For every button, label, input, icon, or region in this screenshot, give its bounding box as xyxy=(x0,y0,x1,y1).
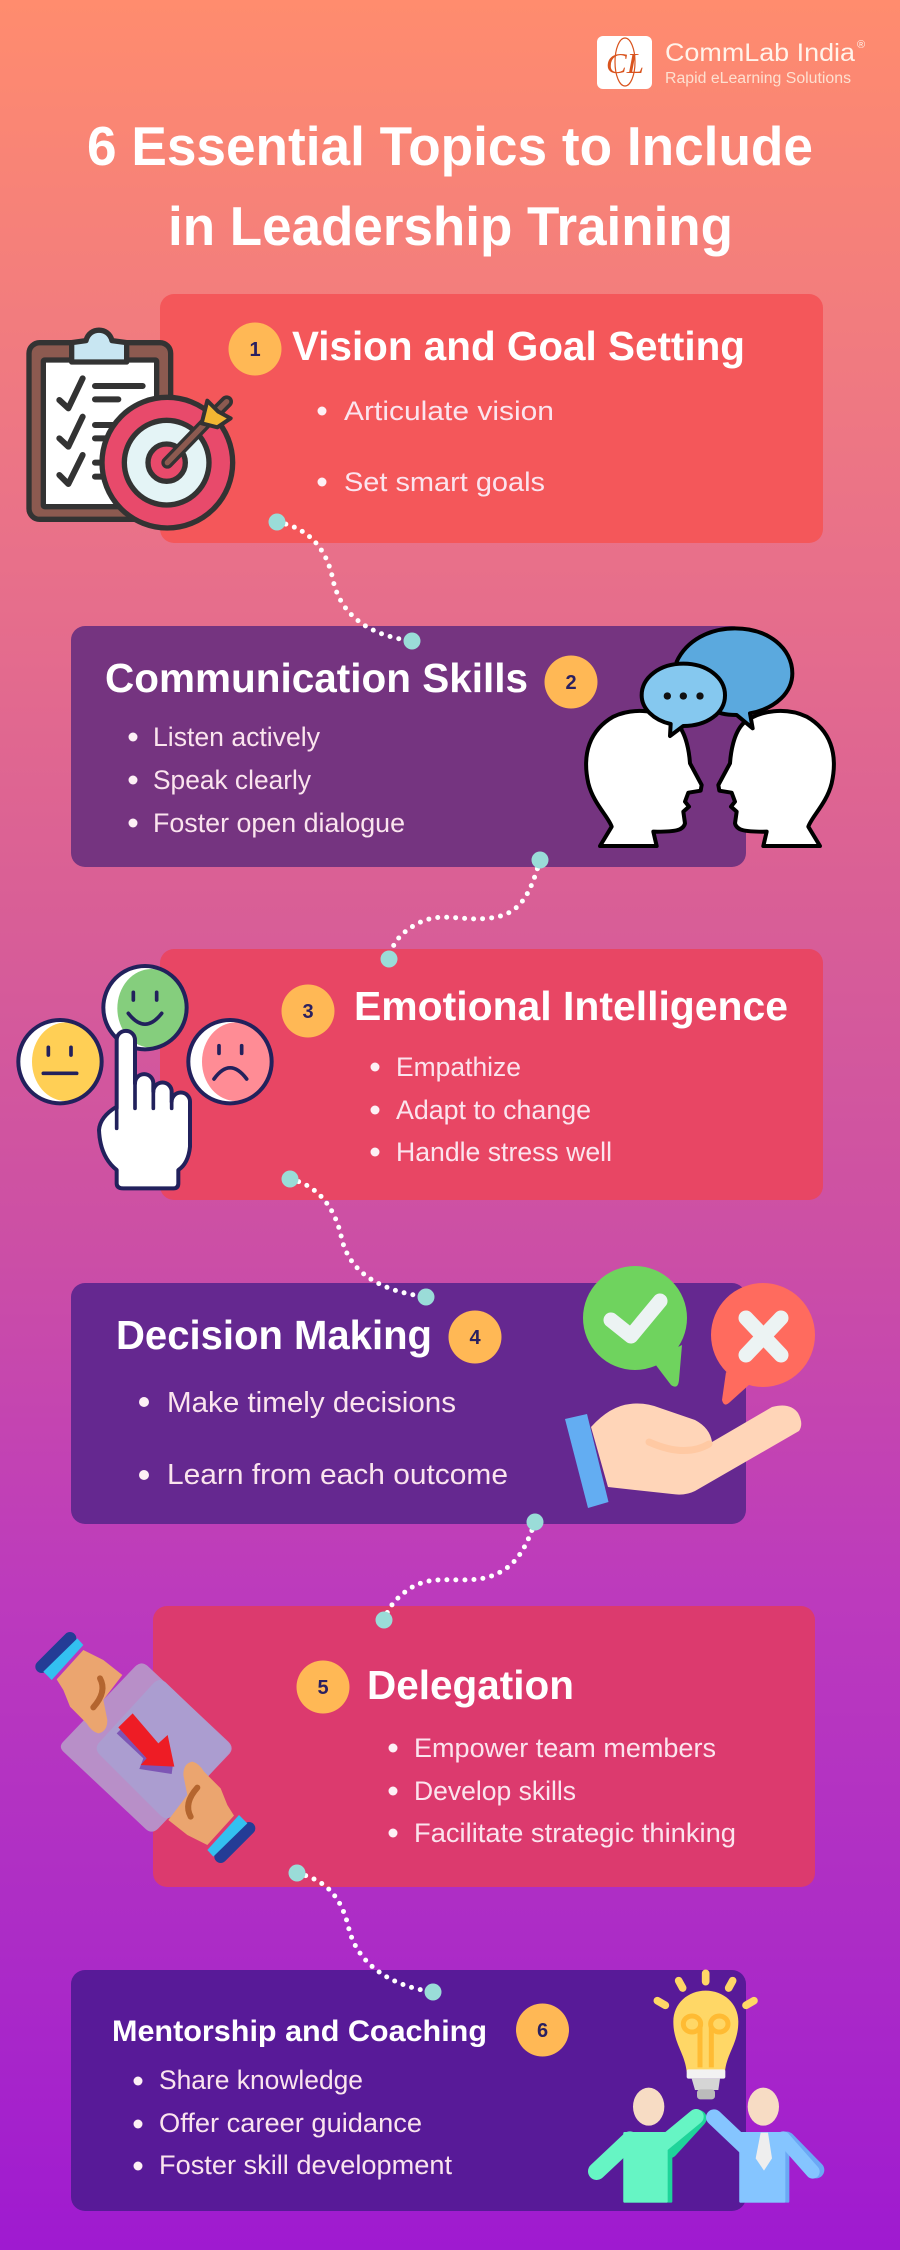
heading 1: Vision and Goal Setting xyxy=(292,323,745,369)
panel 4: Decision Making xyxy=(71,1266,815,1524)
bullets 1: Articulate vision xyxy=(344,396,554,426)
number badge 2: 2 xyxy=(565,672,577,694)
bullets 3: Handle stress well xyxy=(396,1137,612,1167)
connector: step 4 to 5 xyxy=(376,1514,544,1628)
number badge 2 xyxy=(544,656,598,708)
bullets 5: Facilitate strategic thinking xyxy=(414,1818,736,1848)
bullets 2: Listen actively xyxy=(153,722,320,752)
connector: step 2 to 3 xyxy=(380,852,548,968)
bullets 3: Adapt to change xyxy=(396,1095,591,1125)
bullets 1 xyxy=(318,396,554,497)
heading 3: Emotional Intelligence xyxy=(354,983,788,1029)
logo: CommLab India: ® xyxy=(857,39,865,51)
logo: CommLab India: Rapid eLearning Solutions xyxy=(665,70,851,87)
logo: CommLab India: CL xyxy=(606,48,644,80)
number badge 3 xyxy=(282,984,334,1038)
bullets 2: Speak clearly xyxy=(153,765,311,795)
connector: step 1 to 2 xyxy=(268,514,420,650)
bullets 2 xyxy=(128,722,405,838)
logo: CommLab India: CommLab India xyxy=(665,39,855,67)
bullets 2: Foster open dialogue xyxy=(153,808,405,838)
bullets 3 xyxy=(370,1052,612,1167)
panel 6: Mentorship and Coaching xyxy=(71,1970,816,2211)
number badge 3: 3 xyxy=(302,1001,314,1023)
bullets 6: Share knowledge xyxy=(159,2065,363,2095)
panel 2: Communication Skills xyxy=(71,626,834,867)
icon: hands passing a task with red arrow xyxy=(42,1638,249,1857)
person: right, blue shirt xyxy=(714,2117,816,2203)
bullets 5: Empower team members xyxy=(414,1733,716,1763)
number badge 6 xyxy=(516,2004,569,2056)
bullets 4 xyxy=(139,1387,508,1491)
icon: clipboard and target xyxy=(29,330,233,528)
panel 1: Vision and Goal Setting xyxy=(29,294,823,543)
icon: emotion faces and pointing hand xyxy=(18,966,272,1188)
person: left, green shirt xyxy=(597,2117,698,2203)
number badge 4 xyxy=(448,1310,502,1364)
panel 3: Emotional Intelligence xyxy=(18,949,823,1200)
number badge 4: 4 xyxy=(469,1327,481,1349)
bullets 3: Empathize xyxy=(396,1052,521,1082)
title: 6 Essential Topics to Include xyxy=(87,115,813,177)
icon: two heads with speech bubbles xyxy=(586,628,834,846)
heading 2: Communication Skills xyxy=(105,655,528,701)
bullets 6 xyxy=(134,2065,452,2180)
number badge 5: 5 xyxy=(317,1677,329,1699)
title: in Leadership Training xyxy=(168,195,733,257)
number badge 1: 1 xyxy=(249,339,261,361)
bullets 5: Develop skills xyxy=(414,1776,576,1806)
bullets 6: Foster skill development xyxy=(159,2150,452,2180)
title xyxy=(87,115,813,257)
bullets 4: Learn from each outcome xyxy=(167,1459,508,1491)
bullets 5 xyxy=(388,1733,736,1848)
bullets 6: Offer career guidance xyxy=(159,2108,422,2138)
heading 6: Mentorship and Coaching xyxy=(112,2015,487,2048)
bullets 1: Set smart goals xyxy=(344,467,545,497)
heading 4: Decision Making xyxy=(116,1312,432,1358)
icon: two people and light bulb xyxy=(597,1973,816,2203)
panel 5: Delegation xyxy=(42,1606,815,1887)
number badge 1 xyxy=(228,322,282,376)
logo: CommLab India xyxy=(597,36,865,89)
number badge 6: 6 xyxy=(537,2020,548,2042)
heading 5: Delegation xyxy=(367,1662,574,1708)
icon: check and cross bubbles over open hand xyxy=(565,1266,815,1508)
number badge 5 xyxy=(296,1660,350,1714)
bullets 4: Make timely decisions xyxy=(167,1387,456,1419)
connector: step 5 to 6 xyxy=(288,1864,442,2000)
connector: step 3 to 4 xyxy=(282,1170,434,1306)
